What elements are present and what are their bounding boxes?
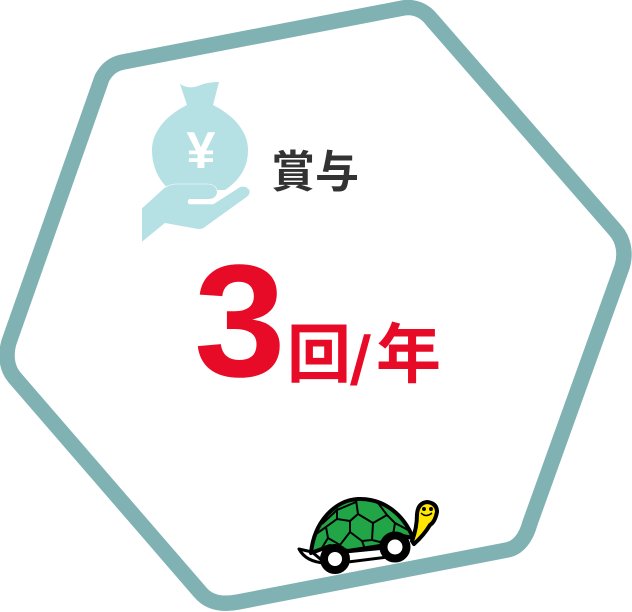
big number 3: 3 bbox=[194, 232, 286, 410]
head and neck bbox=[412, 502, 437, 544]
shell bbox=[311, 499, 413, 553]
icon: turtle on wheels bbox=[299, 499, 437, 570]
face bbox=[421, 508, 432, 516]
icon: money bag on hand bbox=[142, 82, 250, 242]
rear wheel bbox=[324, 548, 346, 570]
shell pattern bbox=[316, 500, 408, 551]
unit: times: 回 bbox=[287, 319, 351, 391]
tail bbox=[299, 549, 325, 563]
heading: bonus: 賞与 bbox=[271, 148, 359, 197]
front wheel bbox=[384, 536, 406, 558]
unit: slash: / bbox=[351, 323, 370, 399]
unit: times per year bbox=[287, 318, 441, 399]
belly bbox=[345, 548, 388, 562]
hand bbox=[142, 184, 250, 242]
unit: year: 年 bbox=[376, 318, 441, 391]
yen sign: ¥ bbox=[187, 122, 216, 180]
bag bbox=[152, 82, 248, 190]
